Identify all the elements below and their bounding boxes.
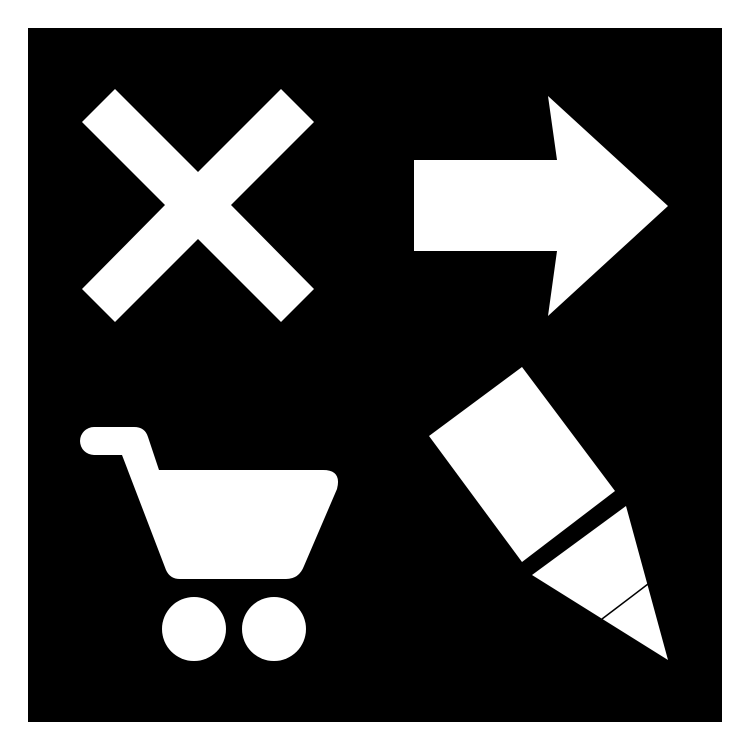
icon: cross [82,89,314,322]
icon: arrow [414,96,668,316]
icon: shopping cart [80,427,338,661]
icon: pencil [429,367,668,660]
